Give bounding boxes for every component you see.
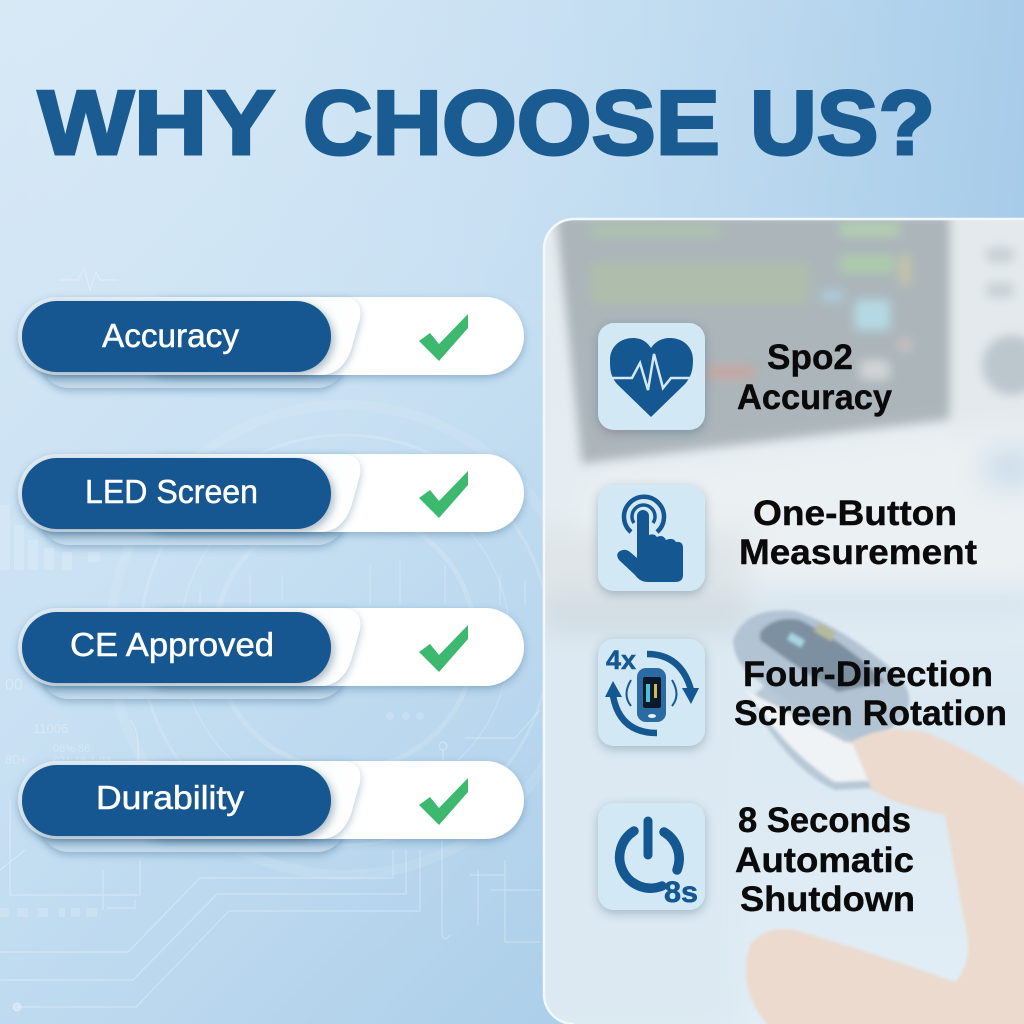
label: Accuracy [102,317,239,354]
background faint tech text: 071 18 1 03 [53,755,111,767]
label: Durability [96,779,245,816]
background bar pattern [0,505,424,917]
row: LED Screen [18,454,524,545]
feature label: Measurement [739,533,977,572]
background faint tech text: 80+ [5,752,27,767]
icon: check mark [419,471,468,518]
panel: feature photo [520,215,1024,1024]
background faint tech text: 00 [5,677,23,694]
background faint tech text: 11006 [33,721,68,736]
feature label: Screen Rotation [734,694,1007,733]
feature label: One-Button [753,494,957,533]
photo: oximeter device [733,610,909,790]
label pill [22,458,331,529]
feature label: Spo2 [767,338,853,377]
photo: lower desk blur [546,448,1024,636]
feature label: Accuracy [737,378,893,417]
title: WHY [38,73,275,174]
background faint tech text [5,677,111,767]
icon: device with rotation arrows [598,639,705,746]
title: US? [750,73,935,174]
icon: heart with pulse [598,323,705,430]
title: CHOOSE [303,73,720,174]
feature label: Shutdown [740,880,915,919]
row: Accuracy [18,297,524,388]
icon: check mark [419,625,468,672]
photo: patient monitor [556,215,1024,464]
icon: power button with 8s: 8s [664,876,698,909]
feature label: Automatic [735,841,914,880]
label: LED Screen [85,473,258,510]
feature label: Four-Direction [743,655,993,694]
icon: check mark [419,314,468,361]
feature: 8 Seconds Automatic Shutdown [598,801,915,919]
panel border [544,219,1024,1024]
background faint tech text: 08% 86 [53,743,90,755]
photo: hand and finger [746,729,1024,1024]
icon: check mark [419,778,468,825]
feature label: 8 Seconds [738,801,911,840]
row: CE Approved [18,608,524,699]
label pill [22,612,331,683]
label pill [22,765,331,836]
feature: Spo2 Accuracy [598,323,893,430]
feature: One-Button Measurement [598,485,977,591]
label pill [22,301,331,372]
row: Durability [18,761,524,852]
background circuit pattern [0,268,580,1011]
feature: Four-Direction Screen Rotation [598,639,1007,746]
label: CE Approved [70,626,274,663]
icon: device with rotation arrows: 4x [606,645,636,675]
icon: power button with 8s [598,803,705,910]
icon: finger pressing button [598,485,705,591]
